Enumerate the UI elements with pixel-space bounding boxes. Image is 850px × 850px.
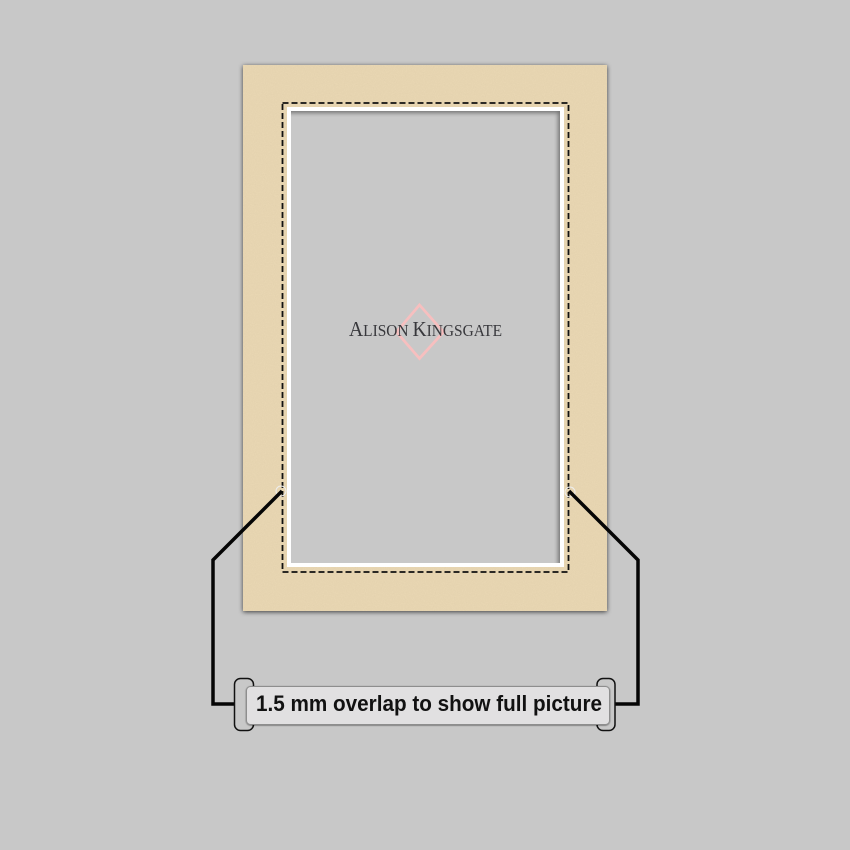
- logo: Alison Kingsgate: [349, 305, 502, 358]
- arrow: right leader line: [565, 487, 638, 704]
- white overlap border and window opening: [286, 106, 565, 567]
- logo text: ALISON KINGSGATE: [349, 317, 502, 341]
- arrow: left leader line: [213, 486, 286, 704]
- label text: 1.5 mm overlap to show full picture: [256, 691, 602, 716]
- callout: overlap label: [234, 678, 615, 730]
- right bracket: [597, 678, 615, 730]
- panel: cream mount board: [243, 65, 607, 611]
- dashed cut line: [282, 103, 568, 572]
- left bracket: [234, 678, 254, 730]
- label box: [246, 686, 610, 724]
- infographic: picture mount diagram: [211, 62, 640, 732]
- icon: pink diamond: [396, 305, 444, 358]
